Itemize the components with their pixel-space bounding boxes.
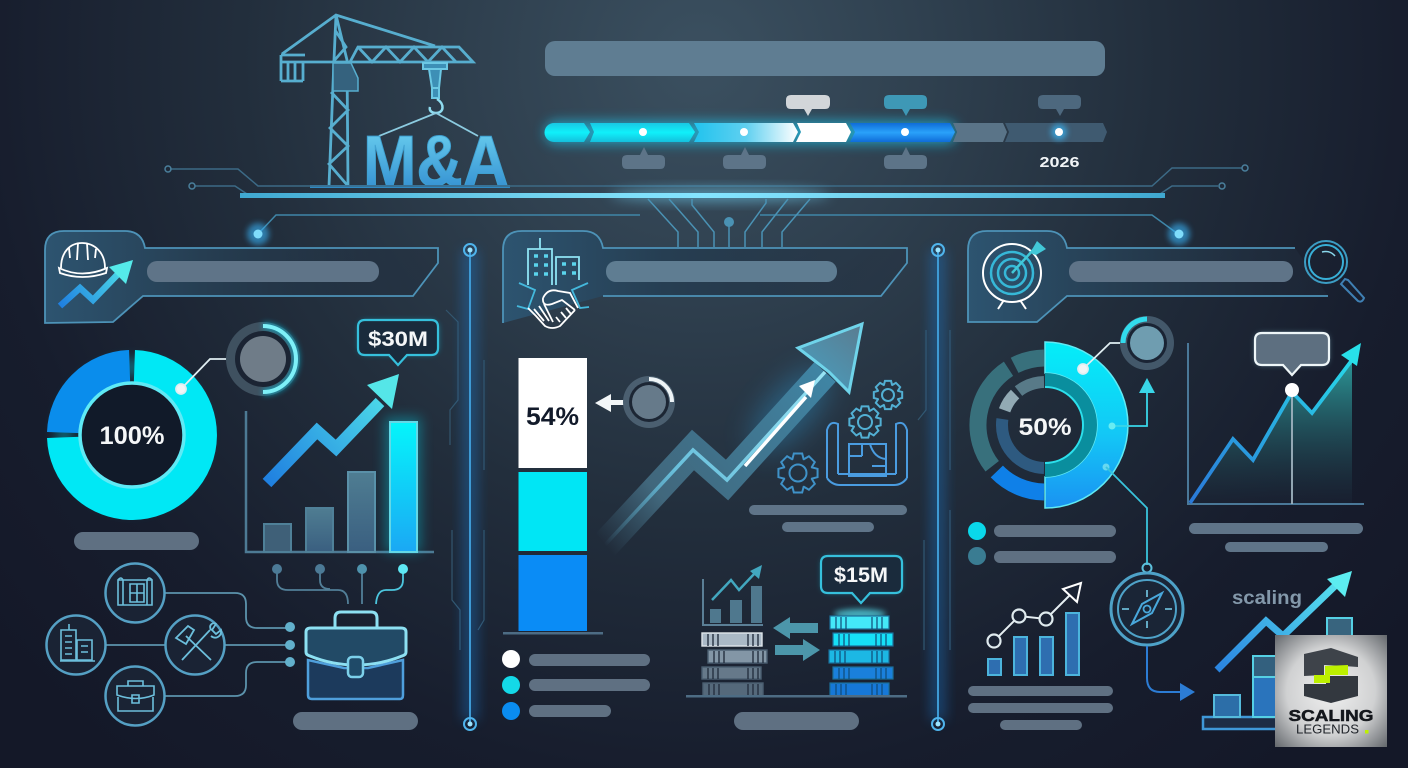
donut value: 50% <box>1018 414 1072 441</box>
stacked bar <box>503 358 603 634</box>
briefcase pin lines <box>272 564 408 604</box>
scaling chart <box>1203 571 1352 729</box>
callout: lower 1 <box>622 147 665 169</box>
arrow to scaling chart <box>1147 646 1195 701</box>
big rising arrow <box>604 324 862 546</box>
callout: lower 2 <box>723 147 766 169</box>
column divider: left <box>462 244 478 730</box>
text placeholder bars <box>749 505 907 532</box>
right coin stack <box>829 609 893 696</box>
segment 1 <box>544 123 590 142</box>
callout: lower 3 <box>884 147 927 169</box>
connector to gauge <box>1078 343 1122 374</box>
header: crane lifting M&A <box>281 15 510 202</box>
logo accent dot <box>1365 730 1368 734</box>
callout: upper white <box>786 95 830 116</box>
rising arrow <box>267 374 399 483</box>
icon: briefcase circle <box>106 666 164 726</box>
header placeholder bar <box>1069 261 1293 282</box>
icon: buildings circle <box>46 616 106 674</box>
panel: left column <box>45 231 439 730</box>
title: M&A: M&A <box>363 122 509 202</box>
callout: upper grey <box>1038 95 1081 116</box>
year label: 2026 <box>1040 154 1080 171</box>
connector node: right <box>1168 223 1190 245</box>
timeline glow <box>545 121 957 144</box>
segment 7 <box>1005 123 1107 142</box>
network connection lines <box>106 593 295 696</box>
icon: buildings and handshake <box>517 238 589 328</box>
mini chart <box>703 565 763 625</box>
icon: compass <box>1111 564 1183 645</box>
logo subline: LEGENDS <box>1296 722 1359 736</box>
segment 4 <box>796 123 851 142</box>
icon: blueprint circle <box>106 564 164 622</box>
area chart <box>1188 343 1364 504</box>
callout: $15M: $15M <box>834 564 888 587</box>
icon: hard hat <box>59 243 107 277</box>
logo wordmark: SCALING <box>1288 708 1374 725</box>
arrow up to gauge <box>1108 378 1155 430</box>
callout: blank tag <box>1255 333 1329 375</box>
gauge <box>623 376 675 428</box>
legend <box>968 522 1116 565</box>
title placeholder bar <box>545 41 1105 76</box>
segment 2 <box>590 123 695 142</box>
segment 5 <box>850 123 955 142</box>
icon: tools circle <box>166 616 224 674</box>
column divider: right <box>930 244 946 730</box>
gauge <box>1120 316 1174 370</box>
crane base line <box>310 185 510 188</box>
text placeholder bars <box>1189 523 1363 552</box>
callout: $30M <box>358 320 439 365</box>
panel header outline <box>968 231 1328 322</box>
gauge <box>226 322 300 396</box>
stack baseline <box>686 695 907 698</box>
arrow to bar <box>595 394 628 412</box>
icon: large briefcase <box>306 612 406 699</box>
bar chart <box>246 411 434 552</box>
panel header fill <box>968 231 1328 322</box>
donut caption bar <box>74 532 199 550</box>
callout: $30M: $30M <box>368 328 428 351</box>
icon: rising arrow <box>60 260 133 306</box>
logo mark <box>1304 648 1358 703</box>
mini chart with trend line <box>988 583 1081 675</box>
panel: middle column <box>502 231 907 730</box>
side circuits, faint <box>446 310 950 650</box>
connector to gauge <box>176 359 230 394</box>
panel header <box>45 231 438 323</box>
icon: target <box>983 241 1046 309</box>
icon: construction crane <box>281 15 478 186</box>
scaling label: scaling <box>1232 588 1302 609</box>
handshake <box>528 290 578 328</box>
stacked bar value: 54% <box>526 403 579 431</box>
circuit connector lines <box>165 165 1248 650</box>
caption bar <box>734 712 859 730</box>
segment 6 <box>953 123 1007 142</box>
callout: $15M <box>821 556 902 603</box>
logo: Scaling Legends <box>1275 635 1387 747</box>
donut chart <box>64 366 200 503</box>
exchange arrows <box>773 617 820 661</box>
timeline dots <box>639 124 1067 140</box>
icon: magnifier <box>1305 241 1364 302</box>
text placeholder bars <box>968 686 1113 730</box>
header placeholder bar <box>606 261 837 282</box>
icon: gears and blueprint <box>778 381 907 493</box>
connector node: left <box>247 223 269 245</box>
panel: right column <box>968 231 1364 730</box>
segmented donut chart <box>978 342 1128 508</box>
connector down to compass <box>1102 464 1147 565</box>
callout: upper teal <box>884 95 927 116</box>
header placeholder bar <box>147 261 379 282</box>
timeline <box>544 95 1107 171</box>
caption bar <box>293 712 418 730</box>
legend <box>502 650 650 720</box>
panel header <box>503 231 907 323</box>
segment 3 <box>694 123 798 142</box>
donut value: 100% <box>100 422 164 450</box>
left coin stack <box>702 633 767 696</box>
